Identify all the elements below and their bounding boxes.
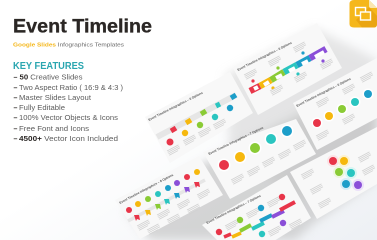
feature list: Free Font and Icons	[19, 126, 90, 133]
feature list: –	[14, 74, 18, 81]
feature list	[14, 74, 123, 143]
slide: band timeline 6 options: Event Timeline Infographics – 6 Options	[148, 91, 204, 122]
slide: stair ribbon 7 options	[202, 175, 311, 240]
slide: grouped circles	[290, 127, 377, 219]
heading: key features: KEY FEATURES	[13, 61, 84, 72]
slide: arrows timeline 8 steps	[115, 156, 223, 239]
feature list: Two Aspect Ratio ( 16:9 & 4:3 )	[19, 85, 123, 92]
feature list: Fully Editable	[19, 105, 65, 112]
feature list: Master Slides Layout	[19, 95, 91, 102]
slide: ribbon timeline 6 options: Event Timeline Infographics – 6 Options	[237, 41, 293, 72]
feature list: –	[14, 105, 18, 112]
feature list: 100% Vector Objects & Icons	[19, 115, 119, 122]
slide: circle timeline center: Event Timeline Infographics – 7 Options	[208, 126, 264, 156]
feature list: –	[14, 95, 18, 102]
feature list: –	[14, 136, 18, 143]
feature list: –	[14, 115, 18, 122]
feature list: –	[14, 85, 18, 92]
slide: arrows timeline 8 steps: Event Timeline Infographics – 8 Options	[119, 173, 174, 205]
subtitle: Google Slides Infographics Templates	[13, 42, 124, 48]
slide: stair ribbon 7 options: Event Timeline Infographics – 7 Options	[206, 194, 262, 225]
slide: circle timeline center	[203, 119, 316, 199]
slide: band timeline 6 options	[145, 72, 253, 163]
icon: google slides	[350, 0, 377, 28]
feature list: 50 Creative Slides	[20, 74, 83, 81]
slide: ribbon timeline 6 options	[233, 23, 342, 115]
feature list: –	[14, 126, 18, 133]
title: Event Timeline	[13, 16, 152, 38]
feature list: 4500+ Vector Icon Included	[19, 136, 118, 143]
slide: circle timeline top right: Event Timeline Infographics – 6 Options	[296, 77, 352, 108]
slide: circle timeline top right	[293, 58, 377, 150]
